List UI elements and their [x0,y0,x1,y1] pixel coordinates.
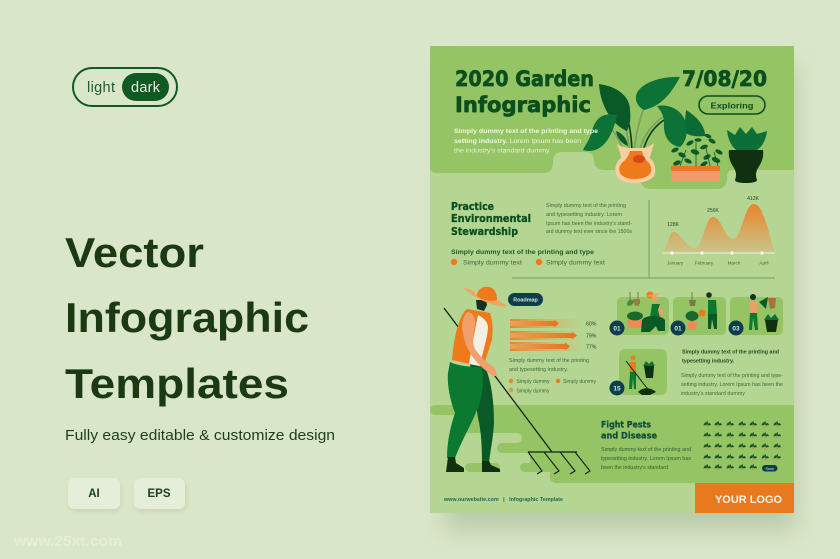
steps text [681,350,783,397]
logo block: YOUR LOGO [715,494,782,506]
section: practice heading: Environmental [451,213,531,225]
practice paragraph: Simply dummy text of the printing [546,203,626,209]
practice paragraph [546,203,632,235]
header text: Simply dummy text of the printing and type [454,128,598,135]
steps text: setting industry. Lorem Ipsum has been the [681,382,783,388]
area chart: March [728,260,741,266]
main heading [65,229,309,407]
subtitle: Fully easy editable & customize design [65,427,335,444]
exploring pill: Exploring [710,100,754,110]
roadmap legend: Simply dummy [516,388,550,394]
section: practice heading [451,201,531,238]
fight pests paragraph: Simply dummy text of the printing and [601,447,691,453]
fight pests heading: Fight Pests [601,420,651,430]
pest icon grid: Soon [765,467,774,471]
practice list: Simply dummy text [463,260,522,266]
progress bars [510,319,597,351]
poster title [455,67,594,117]
header text: setting industry. Lorem Ipsum has been [454,138,581,145]
step card 1 [610,292,669,336]
exploring pill [699,96,765,114]
format badge: EPS [134,478,186,511]
section: practice heading: Practice [451,201,494,213]
main heading: Vector [65,229,204,276]
progress bars: 77% [586,344,597,350]
poster title: Infographic [455,93,591,117]
steps text: Simply dummy text of the printing and type- [681,373,783,379]
watermark: www.25xt.com [13,533,122,550]
badge 15: 15 [613,386,621,392]
practice list: Simply dummy text of the printing and type [451,249,594,256]
header text: the industry's standard dummy. [454,148,551,154]
area chart [663,196,775,266]
step card 3 [728,294,783,336]
pest icon grid [704,421,781,472]
practice paragraph: and typesetting industry. Lorem [546,212,623,218]
header background [430,46,794,189]
footer text: www.ourwebsite.com | Infographic Template [443,497,563,503]
roadmap legend [509,379,596,394]
steps text: Simply dummy text of the printing and [682,350,779,356]
format badge: EPS: EPS [147,488,171,500]
roadmap legend: Simply dummy [516,379,550,385]
step card 2 [670,292,726,336]
poster [430,46,794,513]
main heading: Templates [65,360,289,407]
area chart: April [759,260,769,266]
format badge: AI: AI [88,488,100,500]
practice paragraph: ard dummy text ever since the 1500s [546,229,632,235]
area chart: January [667,260,684,266]
steps text: typesetting industry. [682,358,735,364]
area chart: 412K [747,196,759,202]
roadmap text: Simply dummy text of the printing [509,358,589,364]
fight pests paragraph: typesetting industry. Lorem Ipsum has [601,456,691,462]
practice paragraph: Ipsum has been the industry's stand- [546,221,632,227]
area chart: 128K [667,222,679,228]
fight pests heading [601,420,657,442]
light dark toggle [73,68,177,106]
section: practice heading: Stewardship [451,226,518,238]
roadmap pill: Roadmap [513,298,538,304]
steps text: industry's standard dummy [681,391,745,397]
light dark toggle: light [87,80,115,96]
poster shadow [445,65,795,530]
logo block [695,483,794,513]
practice list: Simply dummy text [546,260,605,266]
progress bars: 79% [586,334,597,340]
poster base [430,46,794,513]
icon: dark pot plant [727,127,767,183]
icon: planter box [671,133,723,182]
fight pests heading: and Disease [601,432,657,442]
illustration: gardener with rake [444,287,590,474]
area chart: February [695,260,714,266]
badge 01 second: 01 [674,326,682,332]
practice list [451,249,605,266]
bottom panel background [430,405,794,483]
header text [454,128,598,154]
step card 4 [610,349,667,396]
poster title: 2020 Garden [455,67,594,91]
roadmap legend: Simply dummy [563,379,596,385]
progress bars: 60% [586,322,597,328]
format badge: AI [68,478,120,511]
main heading: Infographic [65,294,309,341]
icon: large potted plant [583,77,705,183]
fight pests paragraph: been the industry's standard [601,465,668,471]
badge 03: 03 [732,326,740,332]
roadmap pill [508,293,543,306]
light dark toggle: dark [131,80,161,96]
fight pests paragraph [601,447,691,471]
roadmap text: and typesetting industry. [509,367,568,373]
area chart: 256K [707,208,719,214]
date: 7/08/20 [682,67,767,91]
roadmap text [509,358,589,373]
badge 01: 01 [613,326,621,332]
